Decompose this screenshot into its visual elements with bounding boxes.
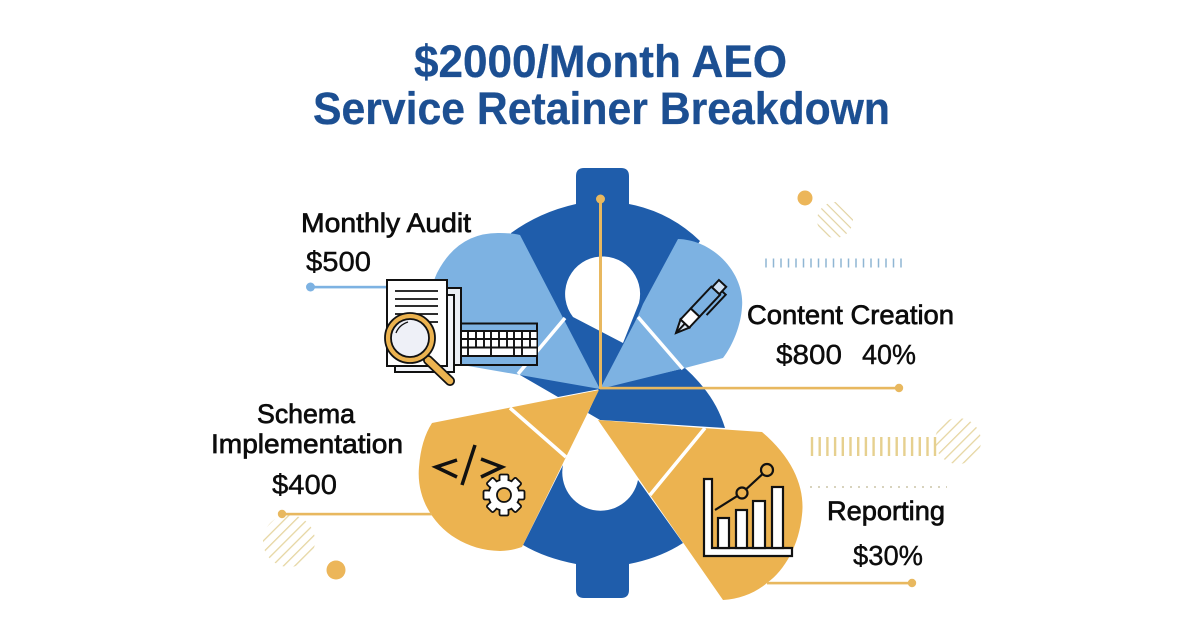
label: monthly audit — [301, 208, 472, 277]
title — [313, 36, 890, 134]
back pages — [395, 288, 461, 365]
label: schema implementation: Implementation — [211, 429, 403, 459]
label: schema implementation: Schema — [257, 399, 356, 429]
label: schema implementation — [211, 399, 403, 500]
content creation segment — [600, 239, 742, 389]
decorative dots and hatches — [263, 190, 981, 580]
label: monthly audit: $500 — [306, 246, 371, 277]
icon: code brackets and gear — [436, 445, 524, 516]
icon: documents, magnifier and keyboard — [385, 280, 537, 381]
label: content creation — [747, 300, 954, 370]
label: content creation: 40% — [862, 339, 916, 370]
monthly audit segment — [430, 233, 600, 389]
reporting segment — [598, 420, 803, 600]
label: schema implementation: $400 — [272, 469, 337, 500]
keyboard — [460, 324, 537, 365]
icon: pen — [672, 279, 730, 340]
icon: bar chart — [704, 464, 792, 556]
upper hole — [565, 256, 640, 343]
label: reporting: Reporting — [827, 496, 945, 526]
leader lines — [278, 194, 916, 587]
top dark segment — [511, 168, 700, 397]
title: Service Retainer Breakdown — [313, 83, 890, 134]
segment dividers — [510, 317, 705, 495]
dollar sign chart — [419, 168, 803, 600]
label: reporting: $30% — [853, 540, 923, 571]
bottom dark segment — [523, 465, 683, 598]
gear — [484, 474, 524, 516]
magnifier — [385, 313, 450, 381]
title: $2000/Month AEO — [414, 36, 787, 87]
schema segment — [419, 390, 599, 551]
label: reporting — [827, 496, 945, 571]
label: content creation: Content Creation — [747, 300, 954, 330]
right middle dark segment — [588, 368, 725, 428]
front page — [387, 280, 447, 366]
label: content creation: $800 — [776, 339, 842, 370]
code brackets — [436, 445, 502, 485]
label: monthly audit: Monthly Audit — [301, 208, 472, 238]
